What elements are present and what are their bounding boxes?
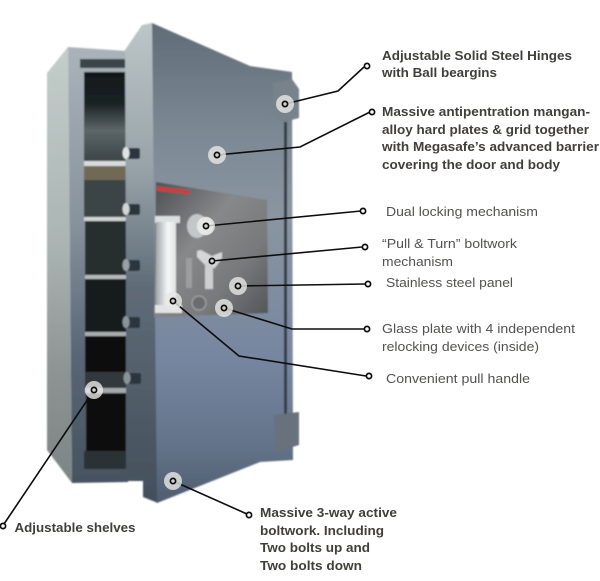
label: boltwork: boltwork. Including — [260, 523, 384, 538]
label: barrier: alloy hard plates & grid together — [382, 122, 589, 137]
label: glass plate: Glass plate with 4 independent — [382, 321, 575, 336]
label: pull and turn: “Pull & Turn” boltwork — [382, 236, 518, 251]
label: hinges: with Ball beargins — [381, 65, 497, 80]
marker: hinge — [276, 95, 294, 113]
label: stainless panel: Stainless steel panel — [386, 275, 513, 290]
marker: boltwork — [164, 472, 182, 490]
safe body side — [47, 47, 72, 483]
safe illustration — [47, 23, 299, 503]
brand mark — [157, 186, 190, 194]
key lock — [192, 296, 206, 310]
safe interior — [80, 59, 127, 469]
stainless steel panel — [154, 182, 268, 317]
label: pull and turn: mechanism — [382, 254, 453, 269]
label: pull handle: Convenient pull handle — [386, 371, 530, 386]
marker: handle — [164, 292, 182, 310]
pull handle — [155, 216, 182, 313]
label: hinges: Adjustable Solid Steel Hinges — [382, 48, 572, 63]
label: barrier: Massive antipentration mangan- — [382, 104, 590, 119]
leader lines — [4, 67, 370, 524]
label: boltwork: Two bolts up and — [260, 540, 370, 555]
marker: barrier — [208, 146, 226, 164]
door top hinge — [273, 79, 299, 122]
door right groove — [284, 122, 287, 414]
door bottom hinge — [274, 412, 299, 452]
marker: shelf — [85, 381, 103, 399]
door edge — [125, 23, 158, 503]
safe body front frame — [68, 47, 128, 483]
dial lock — [187, 214, 213, 238]
marker: pull and turn — [209, 258, 215, 264]
label: barrier: with Megasafe’s advanced barrier — [381, 139, 599, 154]
label: shelves: Adjustable shelves — [14, 520, 136, 535]
label: boltwork: Massive 3-way active — [260, 505, 397, 520]
door front — [152, 23, 293, 503]
line end points — [0, 63, 375, 529]
label: dual lock: Dual locking mechanism — [386, 204, 538, 219]
marker: lock — [197, 217, 215, 235]
label: glass plate: relocking devices (inside) — [382, 339, 539, 354]
door bolts — [122, 147, 141, 384]
marker: glass plate — [215, 299, 233, 317]
label: boltwork: Two bolts down — [260, 558, 362, 573]
turn handle — [186, 250, 222, 289]
label: barrier: covering the door and body — [382, 157, 561, 172]
marker: stainless panel — [229, 277, 247, 295]
